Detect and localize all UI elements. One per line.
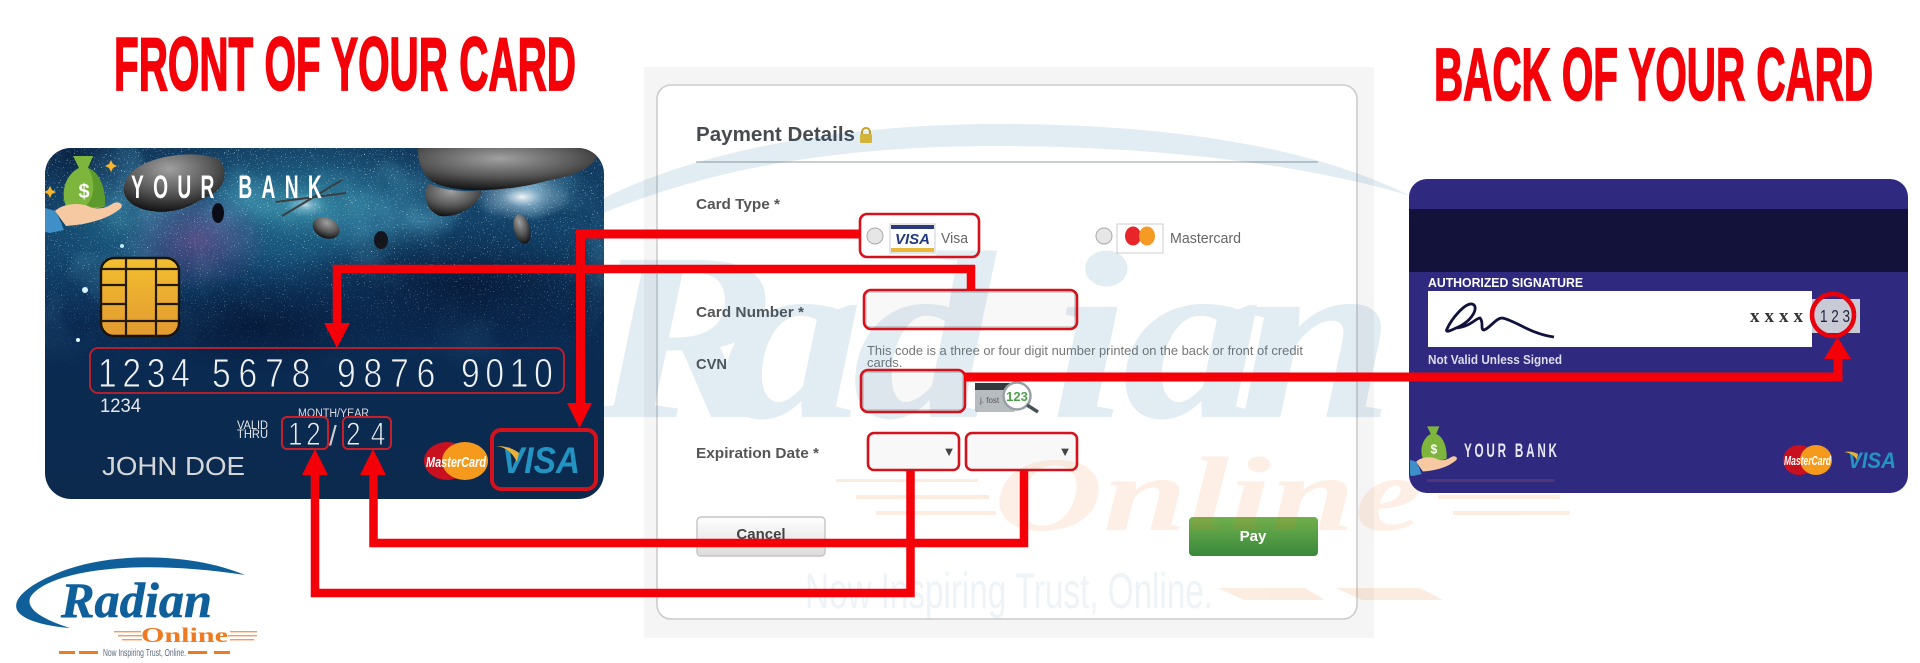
spacecraft <box>276 180 346 216</box>
logo: radian online <box>16 557 257 659</box>
icon: padlock <box>860 128 872 143</box>
button: cancel: Cancel <box>736 526 786 543</box>
select: month: ▼ <box>943 444 955 459</box>
highlight: cvn circle <box>1812 294 1854 336</box>
option: visa <box>867 224 969 253</box>
option: mastercard: Mastercard <box>1170 230 1241 247</box>
card number: 1234 <box>98 350 190 396</box>
panel: payment details form <box>657 85 1357 619</box>
signature strip <box>1428 291 1812 347</box>
panel: front card <box>44 148 604 499</box>
icon: money bag in hand: $ <box>1430 442 1437 456</box>
icon: money bag in hand <box>1410 426 1457 476</box>
logo: mastercard <box>1783 445 1832 475</box>
option: visa: VISA <box>895 231 930 248</box>
highlights: form fields <box>860 214 1077 470</box>
logo: visa: VISA <box>502 440 580 481</box>
expiry date: 24 <box>346 418 385 453</box>
help text: cvn: This code is a three or four digit number printed on the back or front of credit <box>867 343 1303 358</box>
logo: radian online: Online <box>141 623 228 647</box>
arrowhead: year <box>360 449 386 475</box>
label: card type: Card Type * <box>696 196 780 213</box>
arrowhead: card number <box>324 323 350 348</box>
icon: money bag in hand: $ <box>78 181 90 203</box>
asteroids <box>124 148 600 249</box>
option: visa: Visa <box>941 230 969 247</box>
arrowhead: month <box>302 449 328 475</box>
expiry date: 12 <box>288 418 321 453</box>
panel: payment form backdrop <box>644 67 1374 638</box>
magnetic strip <box>1409 209 1908 272</box>
watermark: radian online logo: Now Inspiring Trust, Online. <box>805 563 1213 619</box>
arrow: cvn field to back of card <box>964 358 1838 377</box>
logo: mastercard: MasterCard <box>426 454 487 471</box>
label: card number: Card Number * <box>696 304 804 321</box>
arrow: card number field to card number <box>337 269 971 325</box>
expiry date: / <box>329 420 337 451</box>
logo: radian online: Radian <box>60 572 212 628</box>
input: card number <box>866 292 1075 327</box>
label: cvn: CVN <box>696 356 727 373</box>
button: pay: Pay <box>1240 528 1267 545</box>
label: expiration date: Expiration Date * <box>696 445 819 462</box>
text: card small number: 1234 <box>100 396 141 417</box>
watermark: radian online logo: Radian <box>586 203 1395 469</box>
card number: 9876 <box>337 350 435 396</box>
watermark: radian online logo: Online <box>994 436 1422 553</box>
text: your bank: YOUR BANK <box>131 169 322 205</box>
button: pay <box>1189 517 1318 556</box>
help text: cvn: cards. <box>867 355 902 370</box>
text: authorized signature: AUTHORIZED SIGNATURE <box>1428 275 1583 290</box>
panel: back card <box>1409 179 1908 493</box>
expiry date <box>282 417 391 453</box>
arrow: month select to expiry month <box>315 471 910 593</box>
select: month <box>869 434 958 469</box>
icon: cvn magnifier: j. fost <box>979 396 1000 405</box>
watermark: radian online logo <box>586 124 1570 619</box>
text: your bank: YOUR BANK <box>1464 440 1557 462</box>
logo: mastercard: MasterCard <box>1784 453 1832 468</box>
cvn area <box>1812 299 1860 333</box>
icon: cvn magnifier: 123 <box>1006 389 1028 404</box>
highlight: visa box <box>492 430 596 489</box>
arrowhead: cvn <box>1824 337 1851 359</box>
heading: payment details: Payment Details <box>696 124 855 146</box>
card number: 5678 <box>212 350 310 396</box>
text: cvn digits: 123 <box>1820 307 1850 327</box>
arrow: year select to expiry year <box>374 471 1024 543</box>
signature <box>1447 304 1554 337</box>
arrow: visa option to card visa logo <box>580 234 860 404</box>
text: valid thru: THRU <box>237 427 268 441</box>
select: year <box>967 434 1076 469</box>
card number: 9010 <box>461 350 553 396</box>
text: valid thru: VALID <box>237 418 268 432</box>
card number <box>90 348 564 396</box>
option: mastercard <box>1096 224 1241 253</box>
text: not valid unless signed: Not Valid Unless Signed <box>1428 352 1562 367</box>
icon: cvn magnifier <box>975 382 1038 412</box>
arrowhead: visa <box>567 403 592 428</box>
text: cardholder name: JOHN DOE <box>102 451 245 481</box>
title: front of your card: FRONT OF YOUR CARD <box>114 22 576 106</box>
icon: chip <box>101 258 179 336</box>
select: year: ▼ <box>1059 444 1071 459</box>
button: cancel <box>697 517 825 556</box>
logo: radian online: Now Inspiring Trust, Online. <box>103 648 186 659</box>
logo: visa: VISA <box>1848 448 1896 473</box>
logo: mastercard <box>424 442 488 480</box>
text: xxxx: xxxx <box>1750 306 1804 327</box>
icon: money bag in hand <box>44 156 122 233</box>
text: month year: MONTH/YEAR <box>298 408 369 420</box>
input: cvn <box>863 372 963 410</box>
